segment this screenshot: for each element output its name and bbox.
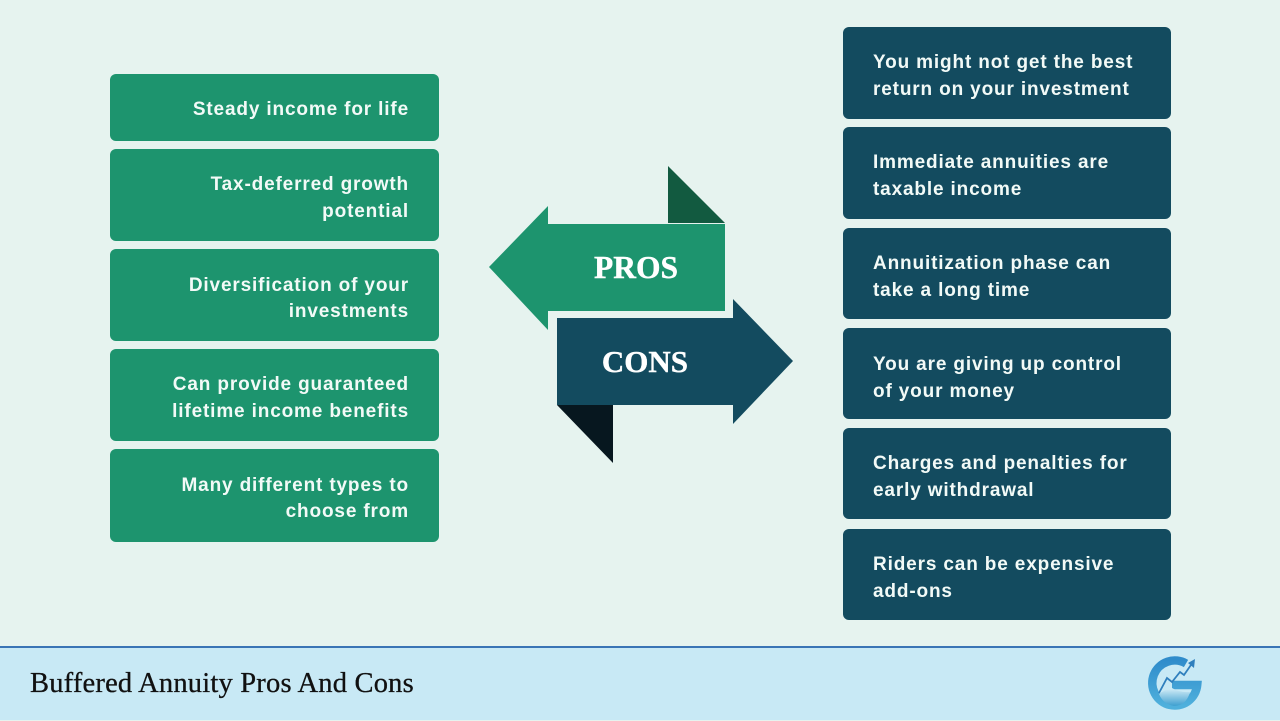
con: charges and penalties: early withdrawal [873, 480, 1034, 500]
panel: pros list [110, 74, 439, 542]
arrow: pros: PROS [594, 250, 678, 285]
footer title: Buffered Annuity Pros And Cons [30, 668, 414, 699]
con: best return [843, 27, 1171, 119]
pro: diversification [110, 249, 439, 341]
pro: tax-deferred growth [110, 149, 439, 241]
con: taxable income: Immediate annuities are [873, 152, 1109, 173]
con: riders: add-ons [873, 580, 953, 602]
icon: logo [1148, 656, 1202, 710]
pro: guaranteed income: Can provide guaranteed [173, 374, 409, 395]
pro: guaranteed income: lifetime income benefits [172, 400, 409, 422]
footer bar [0, 646, 1280, 720]
con: riders: Riders can be expensive [873, 554, 1114, 575]
pro: diversification: Diversification of your [189, 274, 409, 296]
panel: cons list [843, 27, 1171, 620]
pro: many types: Many different types to [181, 474, 409, 496]
pro: diversification: investments [289, 301, 409, 322]
con: best return: You might not get the best [873, 52, 1133, 73]
con: taxable income [843, 127, 1171, 219]
arrow: cons: CONS [602, 344, 688, 379]
con: giving up control: You are giving up control [873, 354, 1122, 375]
pro: tax-deferred growth: potential [322, 200, 409, 222]
con: annuitization phase: take a long time [873, 280, 1030, 300]
con: giving up control [843, 328, 1171, 419]
pro: many types [110, 449, 439, 542]
con: charges and penalties: Charges and penalties for [873, 453, 1128, 474]
con: annuitization phase [843, 228, 1171, 319]
con: charges and penalties [843, 428, 1171, 519]
arrow: cons [557, 299, 793, 463]
con: best return: return on your investment [873, 78, 1130, 100]
con: annuitization phase: Annuitization phase can [873, 253, 1111, 274]
arrow: pros [489, 166, 725, 330]
con: riders [843, 529, 1171, 620]
pro: guaranteed income [110, 349, 439, 441]
pro: steady income [110, 74, 439, 141]
pro: tax-deferred growth: Tax-deferred growth [211, 174, 409, 195]
pro: many types: choose from [286, 501, 409, 522]
con: giving up control: of your money [873, 380, 1015, 402]
con: taxable income: taxable income [873, 178, 1022, 200]
pro: steady income: Steady income for life [193, 98, 409, 120]
